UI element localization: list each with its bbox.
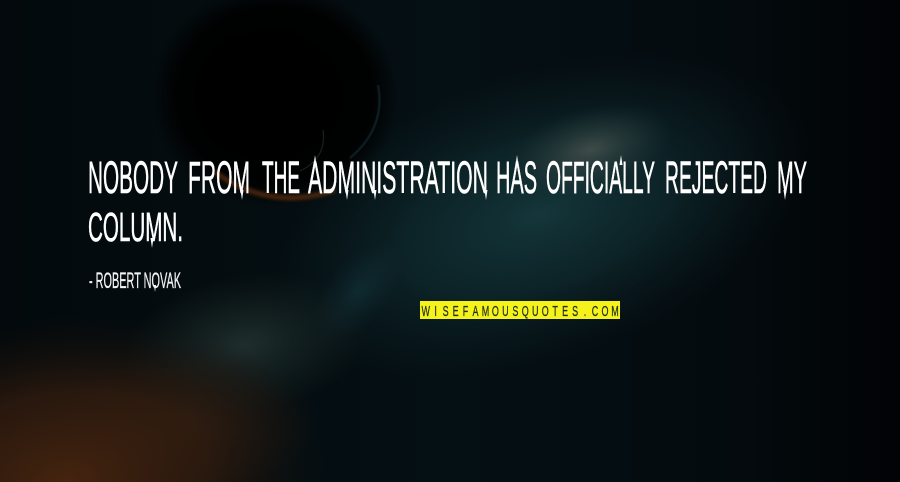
quote text: HAS bbox=[496, 152, 537, 203]
quote text: FROM bbox=[188, 152, 250, 203]
quote poster: MY bbox=[777, 152, 807, 203]
quote text: COLUMN. bbox=[88, 204, 183, 250]
quote text: REJECTED bbox=[665, 152, 767, 203]
quote text: NOBODY bbox=[88, 152, 178, 203]
quote text: ADMINISTRATION bbox=[308, 152, 488, 203]
decorative letter spikes bbox=[150, 155, 786, 292]
planet with faint rim bbox=[150, 0, 400, 207]
quote text bbox=[88, 152, 807, 250]
quote text: THE bbox=[262, 152, 300, 203]
watermark badge: WISEFAMOUSQUOTES.COM bbox=[421, 303, 619, 320]
quote poster: - ROBERT NOVAK bbox=[89, 268, 181, 293]
quote text: OFFICIALLY bbox=[546, 152, 655, 203]
